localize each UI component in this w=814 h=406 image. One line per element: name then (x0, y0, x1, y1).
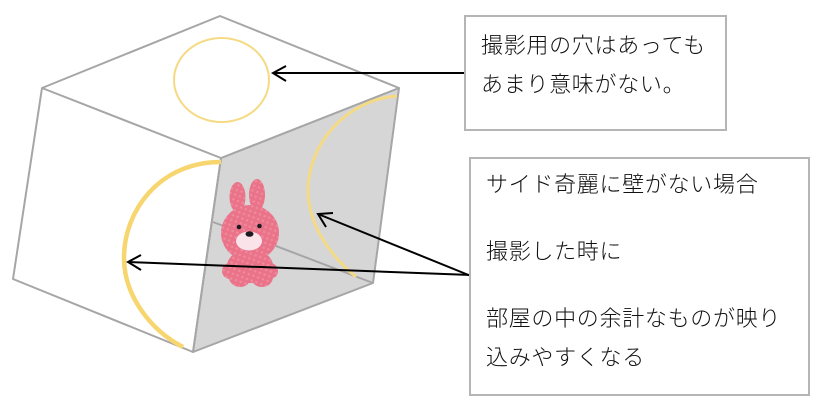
arrow: to right wall arc (318, 213, 471, 276)
callout: top hole note (464, 15, 727, 131)
panel: top face (42, 16, 399, 158)
text: result line 2: 込みやすくなる (486, 345, 645, 370)
text: line 2: あまり意味がない。 (481, 72, 685, 97)
callout: no side walls note (469, 157, 810, 396)
arrow: to left wall arc (128, 255, 471, 275)
text: result line 1: 部屋の中の余計なものが映り (486, 306, 781, 331)
text: condition: サイド奇麗に壁がない場合 (486, 172, 758, 197)
arrow: to top hole (273, 66, 466, 81)
right wall arc (308, 96, 397, 277)
panel: left wall (13, 88, 221, 352)
back floor edge (213, 222, 373, 283)
text: when shooting: 撮影した時に (486, 239, 622, 264)
left wall arc (124, 162, 221, 347)
text: line 1: 撮影用の穴はあっても (481, 33, 706, 58)
top shooting hole (174, 38, 269, 122)
icon: pink rabbit plush (221, 179, 279, 287)
panel: gray right wall (193, 88, 399, 352)
